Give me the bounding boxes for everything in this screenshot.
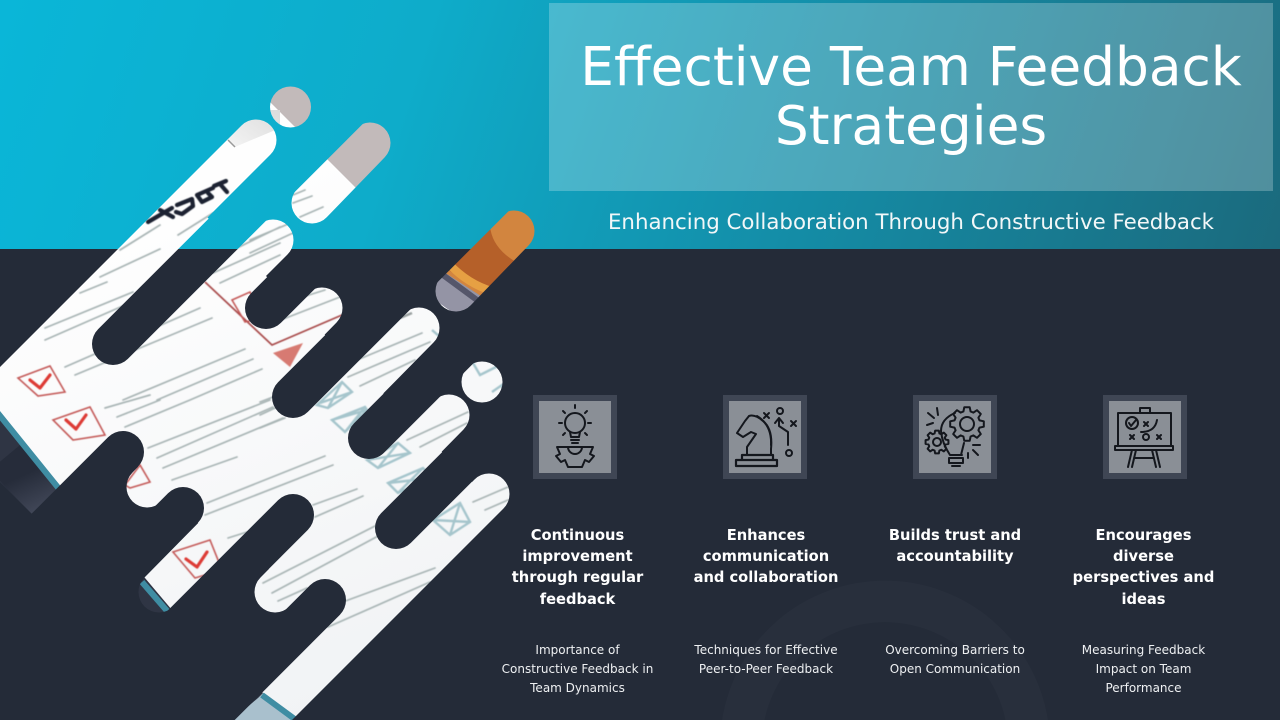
red tick boxes xyxy=(18,292,262,578)
text: constructive feedback: Importance of xyxy=(535,643,620,657)
icon card: chess knight strategy xyxy=(723,395,807,479)
text lines xyxy=(45,190,508,627)
paper sheet xyxy=(0,102,510,716)
text: open communication xyxy=(885,643,1025,676)
heading: diverse perspectives: diverse xyxy=(1113,548,1174,565)
heading: communication: Enhances xyxy=(727,527,805,544)
text: measuring impact: Impact on Team xyxy=(1096,662,1191,676)
title panel xyxy=(549,3,1273,191)
heading: trust xyxy=(889,527,1021,565)
title: Strategies xyxy=(775,94,1047,157)
orange pen tip xyxy=(436,210,534,312)
text: constructive feedback: Team Dynamics xyxy=(530,681,625,695)
heading: continuous improvement: feedback xyxy=(540,591,615,608)
teal paper edge xyxy=(0,412,296,720)
title: Effective Team Feedback xyxy=(580,35,1242,98)
heading: continuous improvement xyxy=(512,527,644,608)
heading: diverse perspectives: perspectives and xyxy=(1073,569,1214,586)
text: open communication: Open Communication xyxy=(890,662,1020,676)
icon card: lightbulb and gear xyxy=(533,395,617,479)
blue tick boxes xyxy=(317,330,505,535)
text: measuring impact xyxy=(1082,643,1206,695)
heading: diverse perspectives: ideas xyxy=(1121,591,1166,608)
top teal gradient band xyxy=(0,0,1280,248)
heading: continuous improvement: through regular xyxy=(512,569,643,586)
text: measuring impact: Performance xyxy=(1105,681,1182,695)
printed heading mark xyxy=(148,181,227,222)
text: open communication: Overcoming Barriers to xyxy=(885,643,1025,657)
heading: continuous improvement: Continuous xyxy=(531,527,624,544)
heading: communication: and collaboration xyxy=(694,569,838,586)
paper edge underside xyxy=(0,420,264,707)
heading: trust: Builds trust and xyxy=(889,527,1021,544)
heading: diverse perspectives xyxy=(1073,527,1214,608)
heading: trust: accountability xyxy=(896,548,1014,565)
icon card: bulb with gears xyxy=(913,395,997,479)
text: peer feedback: Peer-to-Peer Feedback xyxy=(699,662,833,676)
red table outline xyxy=(205,282,342,345)
heading: diverse perspectives: Encourages xyxy=(1096,527,1191,544)
icon card: strategy whiteboard xyxy=(1103,395,1187,479)
text: peer feedback xyxy=(694,643,838,676)
heading: continuous improvement: improvement xyxy=(522,548,633,565)
light blue underside xyxy=(234,693,291,720)
grey diamond below paper edge xyxy=(0,446,56,514)
subtitle: Enhancing Collaboration Through Constructive Feedback xyxy=(608,210,1214,235)
text: measuring impact: Measuring Feedback xyxy=(1082,643,1205,657)
photo: checklist seen through diagonal pill shapes xyxy=(0,86,534,720)
text: constructive feedback: Constructive Feedback in xyxy=(502,662,653,676)
text: constructive feedback xyxy=(502,643,653,695)
clipboard top xyxy=(270,86,390,188)
heading: communication xyxy=(694,527,838,586)
heading: communication: communication xyxy=(703,548,829,565)
title xyxy=(580,35,1242,157)
text: peer feedback: Techniques for Effective xyxy=(694,643,838,657)
